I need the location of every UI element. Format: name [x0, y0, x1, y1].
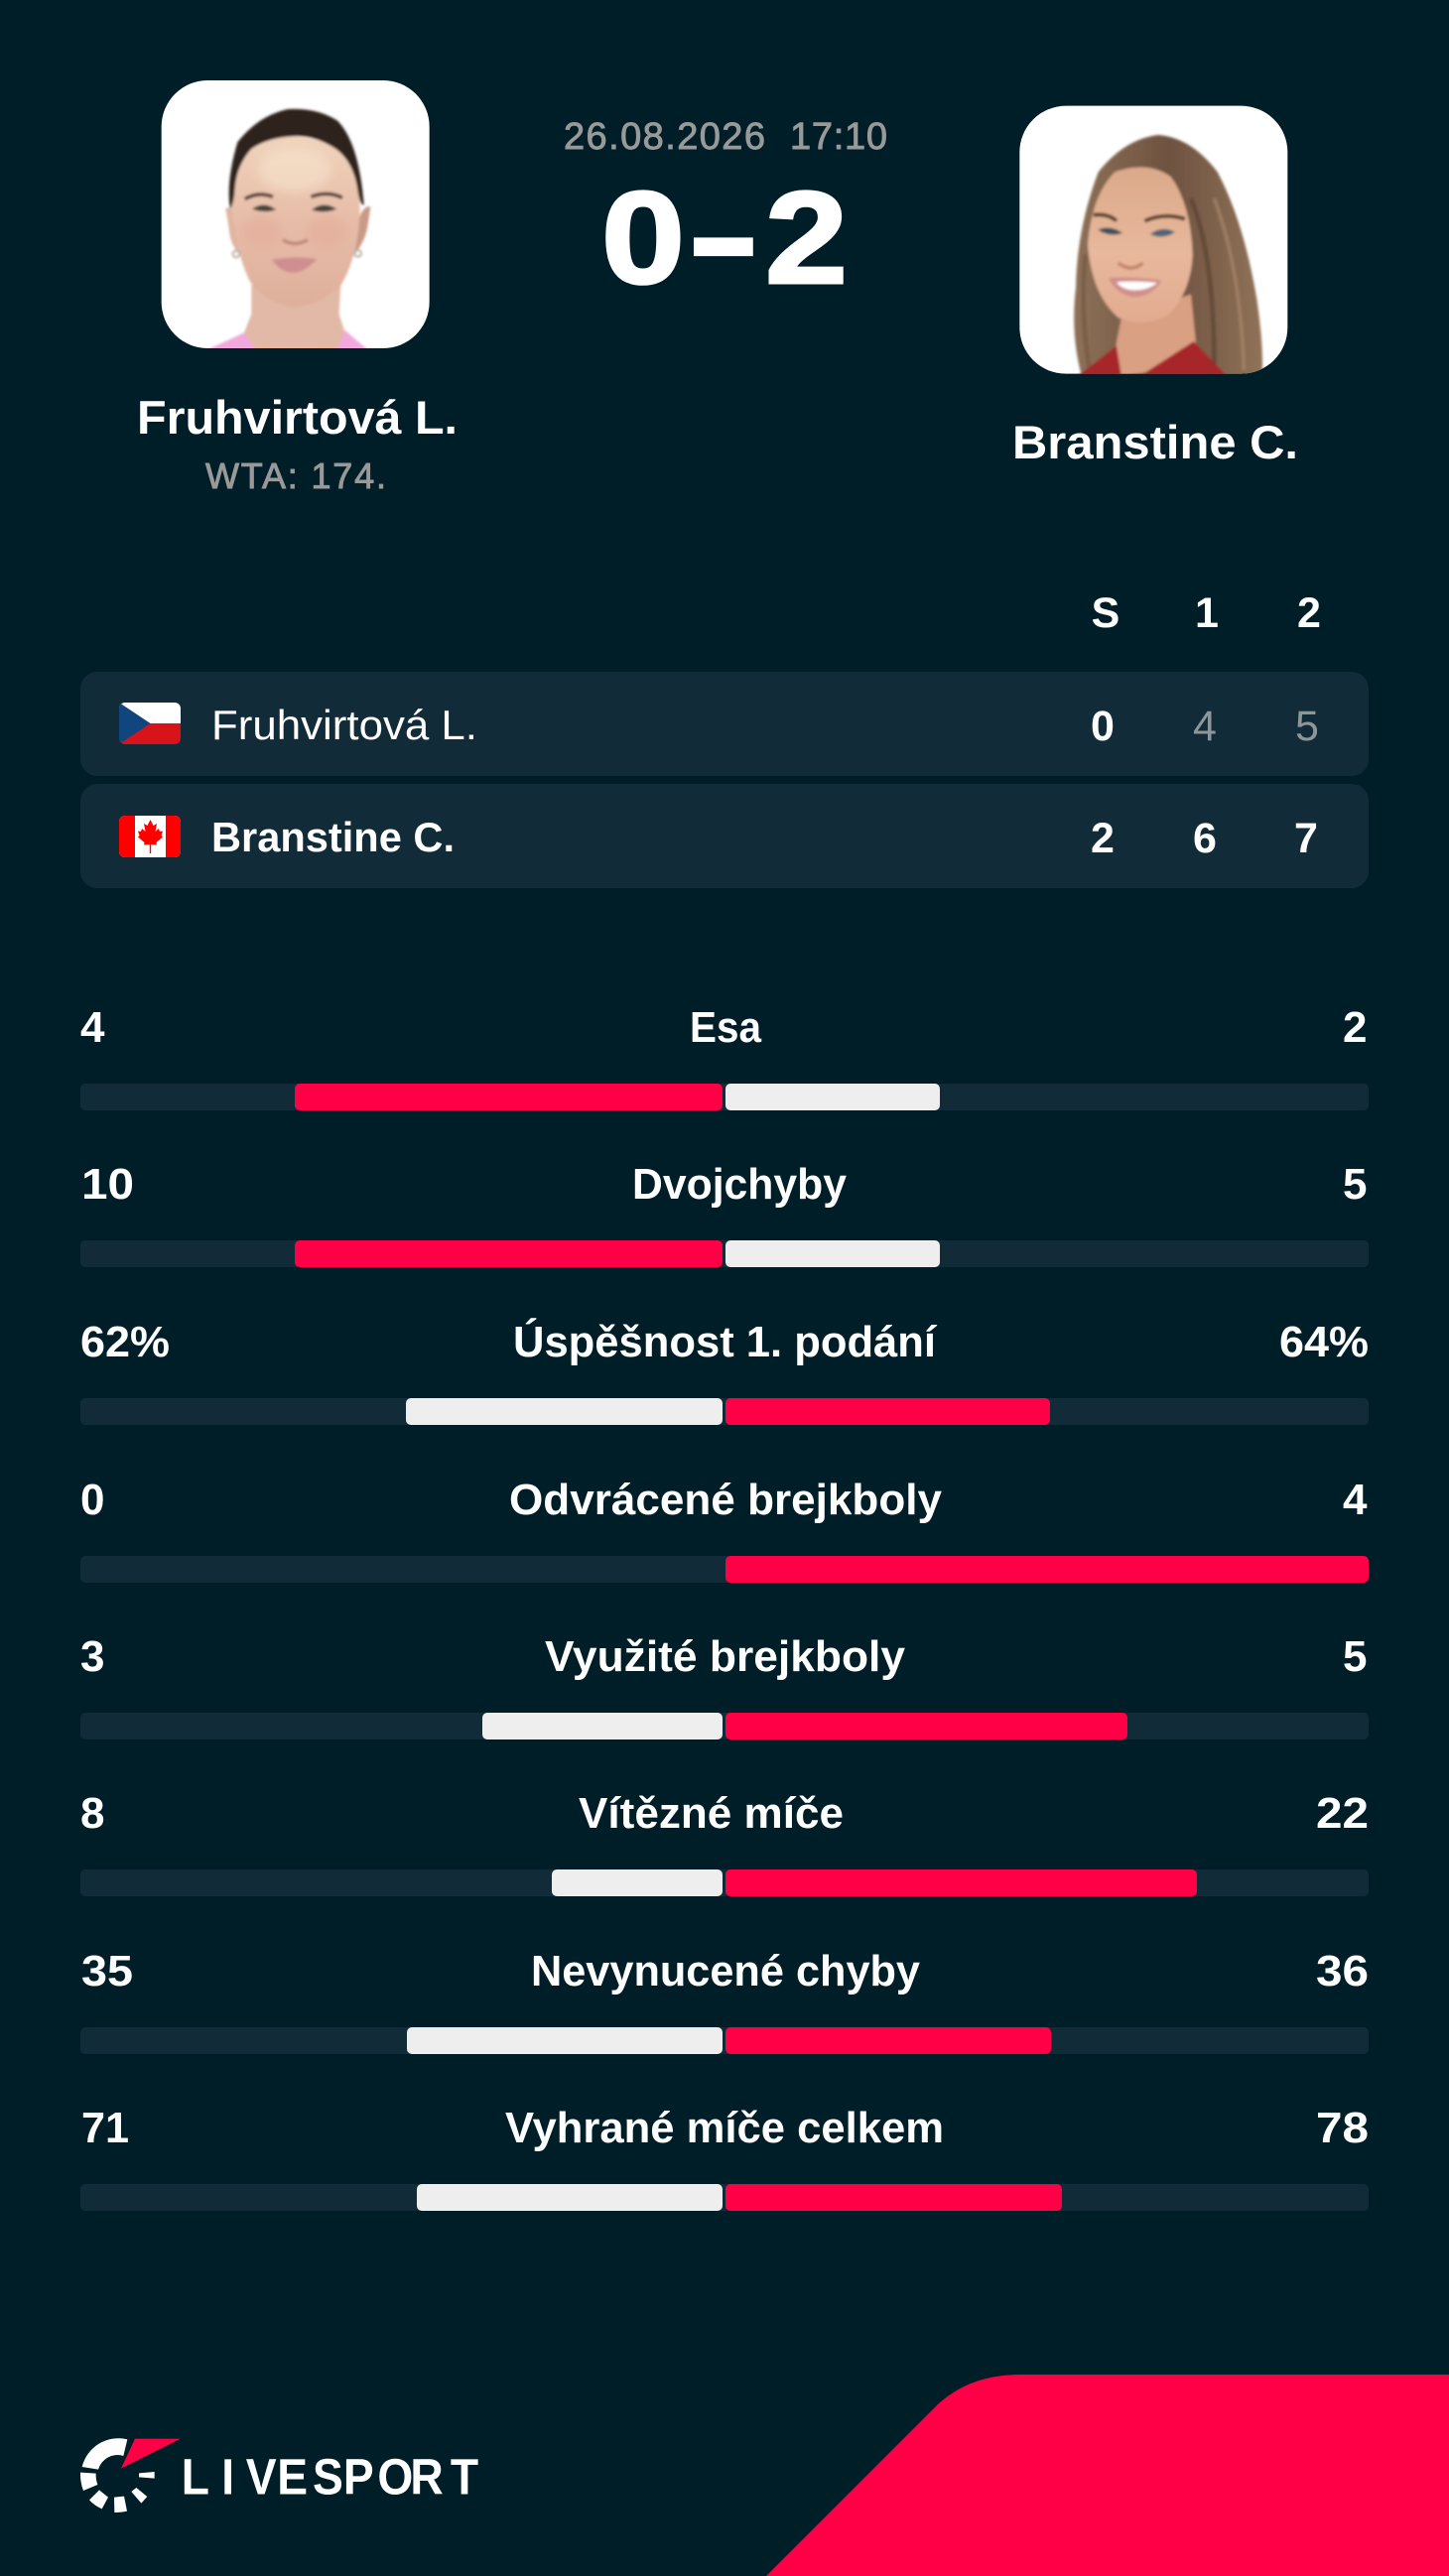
stat: Úspěšnost 1. podání: 62%	[80, 1318, 170, 1366]
stat: Využité brejkboly	[80, 1632, 1369, 1739]
decorative red corner	[766, 2375, 1449, 2576]
stat: Využité brejkboly: 5	[1343, 1632, 1367, 1681]
stat: Vítězné míče: Vítězné míče	[579, 1789, 844, 1838]
scoreboard row: Branstine C.: 2	[1091, 815, 1115, 862]
ranking: WTA: 174.	[205, 455, 386, 496]
stat: Nevynucené chyby: 35	[81, 1947, 133, 1996]
logo: Livesport	[80, 2438, 478, 2512]
stat: Úspěšnost 1. podání: 64%	[1279, 1318, 1369, 1366]
stat: Odvrácené brejkboly: 0	[80, 1476, 104, 1524]
match score	[601, 163, 848, 311]
stat: Esa: 2	[1343, 1003, 1367, 1052]
stat: Vítězné míče	[80, 1789, 1369, 1896]
stat: Dvojchyby: 10	[81, 1160, 134, 1209]
player name: Fruhvirtová L.: Fruhvirtová L.	[137, 391, 458, 444]
match score: -	[688, 163, 759, 309]
stat: Využité brejkboly: 3	[80, 1632, 104, 1681]
stat: Dvojchyby: Dvojchyby	[632, 1160, 848, 1209]
match score: 2	[765, 165, 848, 311]
stat: Odvrácené brejkboly: 4	[1343, 1476, 1368, 1524]
stat: Využité brejkboly: Využité brejkboly	[545, 1632, 906, 1681]
icon: stopwatch mark	[80, 2438, 181, 2512]
stat: Dvojchyby	[80, 1160, 1369, 1267]
player photo: Branstine C.	[1019, 106, 1287, 376]
date and time	[564, 116, 887, 158]
player photo: Fruhvirtová L.	[162, 80, 430, 350]
match score: 0	[601, 165, 685, 311]
icon: Czech flag	[119, 703, 181, 744]
icon: Canadian flag	[119, 816, 181, 857]
stat: Úspěšnost 1. podání: Úspěšnost 1. podání	[513, 1317, 938, 1366]
stat: Úspěšnost 1. podání	[80, 1317, 1369, 1425]
stat: Vyhrané míče celkem: Vyhrané míče celkem	[505, 2104, 944, 2152]
scoreboard row: Fruhvirtová L.: 5	[1295, 703, 1319, 750]
scoreboard column headers: S	[1092, 589, 1120, 637]
stat: Vítězné míče: 8	[80, 1789, 104, 1838]
scoreboard row: Fruhvirtová L.: 4	[1193, 703, 1217, 750]
logo: Livesport: LIVESPORT	[182, 2449, 478, 2506]
scoreboard row: Branstine C.: 7	[1294, 815, 1318, 862]
player name: Branstine C.: Branstine C.	[1012, 416, 1298, 468]
scoreboard row: Fruhvirtová L.: Fruhvirtová L.	[211, 702, 477, 748]
stat: Vyhrané míče celkem	[80, 2104, 1369, 2211]
scoreboard column headers: 1	[1195, 589, 1219, 637]
stat: Nevynucené chyby: Nevynucené chyby	[531, 1947, 921, 1996]
stat: Vyhrané míče celkem: 78	[1316, 2104, 1369, 2152]
stat: Nevynucené chyby	[80, 1947, 1369, 2054]
scoreboard row: Branstine C.: Branstine C.	[211, 814, 455, 860]
scoreboard row: Branstine C.	[80, 784, 1369, 888]
stat: Dvojchyby: 5	[1343, 1160, 1367, 1209]
stat: Odvrácené brejkboly: Odvrácené brejkboly	[509, 1476, 943, 1524]
stat: Esa: Esa	[690, 1003, 761, 1052]
scoreboard column headers	[1092, 589, 1321, 637]
stat: Vyhrané míče celkem: 71	[81, 2104, 129, 2152]
stat: Esa	[80, 1003, 1369, 1110]
scoreboard column headers: 2	[1297, 589, 1321, 637]
scoreboard row: Branstine C.: 6	[1193, 815, 1217, 862]
stat: Nevynucené chyby: 36	[1316, 1947, 1369, 1996]
stat: Esa: 4	[80, 1003, 105, 1052]
stat: Vítězné míče: 22	[1316, 1789, 1369, 1838]
date and time: 17:10	[790, 116, 887, 158]
date and time: 26.08.2026	[564, 116, 765, 158]
scoreboard row: Fruhvirtová L.: 0	[1091, 703, 1115, 750]
stat: Odvrácené brejkboly	[80, 1476, 1369, 1583]
scoreboard row: Fruhvirtová L.	[80, 672, 1369, 776]
